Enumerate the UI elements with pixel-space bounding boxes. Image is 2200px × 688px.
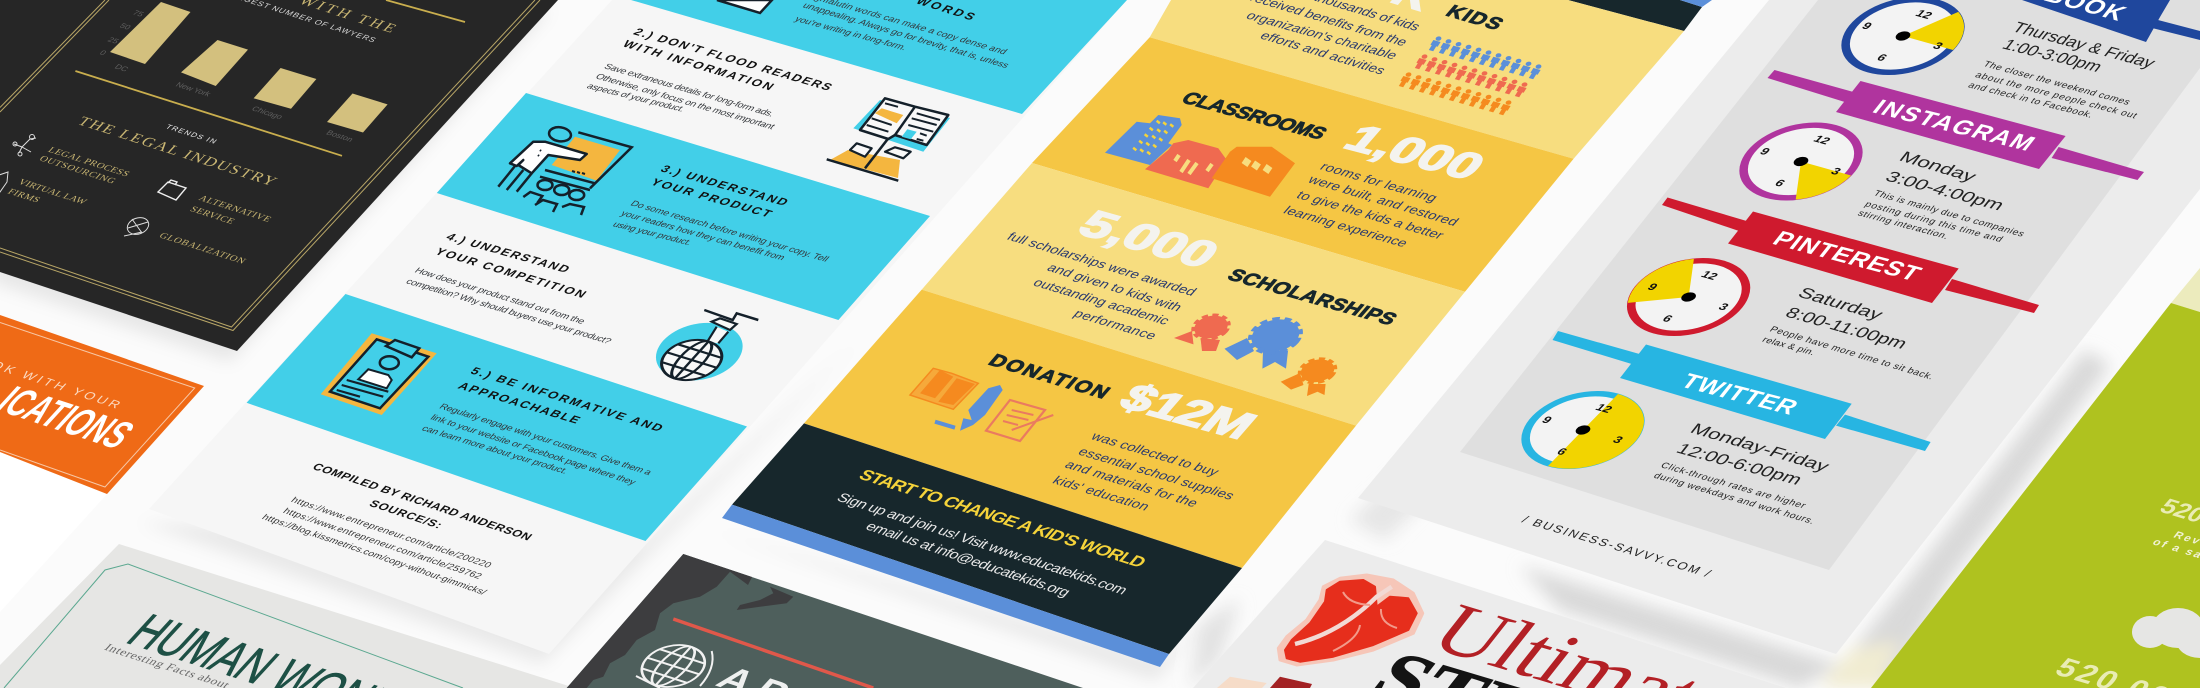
bar chart: lawyers by city: 75 — [131, 9, 146, 18]
text block: legal trends list: ALTERNATIVE — [196, 194, 273, 224]
band: scholarships — [922, 163, 1465, 426]
ribbon: instagram — [1768, 70, 2144, 180]
text: instagram times: 3:00-4:00pm — [1882, 168, 2009, 214]
call to action: email us at info@educatekids.org — [862, 520, 1073, 600]
text block: legal trends list — [5, 146, 273, 266]
text: tip 5: link to your website or Facebook page where they — [428, 413, 638, 487]
stat: 1,000 rooms: to give the kids a better — [1293, 189, 1448, 242]
text: credits and sources: https://www.entrepreneur.com/article/200220 — [288, 496, 494, 570]
text: tip 3: 3.) UNDERSTAND — [658, 163, 792, 208]
stat: kids: KIDS — [1441, 2, 1507, 34]
icon: disco ball — [639, 310, 759, 390]
text: tip 3: your readers how they can benefit from — [618, 209, 787, 263]
section: instagram — [1721, 70, 2144, 244]
ribbon: twitter — [1552, 331, 1931, 451]
stat: kids: organization's charitable — [1243, 9, 1401, 62]
text: instagram times: This is mainly due to companies — [1871, 189, 2027, 239]
panel: black legal industry card — [0, 0, 558, 351]
text: facebook times: The closer the weekend comes — [1981, 60, 2133, 107]
icon: id clipboard — [321, 333, 437, 415]
text: tip 1 body: unappealing. Always go for brevity, that is, unless — [800, 1, 1011, 70]
text: tip 3: Do some research before writing your copy. Tell — [628, 199, 831, 264]
icon: rows of people — [1397, 36, 1543, 116]
band: tip 1 — [631, 0, 1127, 114]
clock: instagram: 12 — [1810, 133, 1834, 147]
clock: facebook — [1823, 0, 1986, 84]
text: tip 3 — [610, 163, 831, 264]
text: tip 5 — [419, 365, 666, 487]
ribbon: twitter: TWITTER — [1675, 370, 1803, 420]
stat: donation: essential school supplies — [1075, 445, 1238, 502]
panel: social media timing card — [1358, 0, 2200, 654]
text: tip 1 body: you're writing in long-form. — [792, 15, 909, 52]
stat: 5,000 scholarships — [1004, 202, 1401, 342]
clock: twitter: 9 — [1539, 414, 1555, 426]
text: facebook times: and check in to Facebook. — [1966, 81, 2095, 120]
text: credits and sources: COMPILED BY RICHARD ANDERSON — [310, 461, 535, 543]
clock: twitter: 12 — [1592, 402, 1616, 415]
text: credits and sources: https://blog.kissmetrics.com/copy-without-gimmicks/ — [259, 513, 489, 597]
text: tip 2: Otherwise, only focus on the most important — [593, 72, 777, 132]
panel: human wonders card — [0, 544, 575, 688]
swatches — [1217, 677, 1267, 688]
stat: 5,000 scholarships: SCHOLARSHIPS — [1223, 266, 1401, 329]
panel: green card — [1871, 268, 2200, 688]
red rule — [673, 619, 873, 688]
text: twitter times: during weekdays and work hours. — [1651, 471, 1817, 526]
clock: pinterest: 3 — [1715, 301, 1732, 313]
text: facebook times — [1966, 18, 2160, 121]
band: call to action — [732, 423, 1242, 654]
stat: 5,000 scholarships: and given to kids with — [1044, 260, 1186, 314]
clock: instagram: 9 — [1757, 146, 1773, 157]
clock: instagram: 6 — [1772, 177, 1788, 189]
stat: donation: and materials for the — [1062, 457, 1202, 510]
clock: facebook: 6 — [1874, 52, 1890, 64]
text: pinterest times: relax & pin. — [1760, 335, 1817, 357]
panel: dark map card — [567, 554, 1083, 688]
stat: kids — [1243, 0, 1507, 77]
bar chart: lawyers by city: Chicago — [250, 105, 285, 121]
text: twitter times: Click-through rates are higher — [1658, 461, 1809, 511]
clock: twitter: 3 — [1610, 434, 1626, 446]
text: pinterest times: Saturday — [1794, 284, 1888, 323]
clock: instagram — [1721, 114, 1884, 209]
icon: award ribbons — [1174, 312, 1341, 396]
text block: legal trends list: FIRMS — [5, 187, 42, 205]
text: instagram times: posting during this time and — [1862, 200, 2005, 244]
clock: pinterest: 6 — [1659, 313, 1676, 325]
ribbon: facebook — [1969, 0, 2200, 42]
call to action: Sign up and join us! Visit www.educatekids.com — [833, 491, 1130, 598]
stat: donation: was collected to buy — [1087, 430, 1222, 478]
bar chart: lawyers by city: Boston — [324, 129, 356, 144]
ribbon: pinterest — [1662, 198, 2039, 313]
text: twitter times — [1651, 420, 1834, 526]
band: kids — [1150, 0, 1684, 159]
ribbon: instagram: INSTAGRAM — [1867, 96, 2040, 156]
heading: trends in the legal industry: TRENDS IN — [164, 123, 219, 145]
panel: blue tips card — [149, 0, 1127, 654]
stat: 5,000 scholarships: outstanding academic — [1030, 276, 1173, 327]
bar chart: lawyers by city: 50 — [118, 22, 133, 31]
text block: legal trends list: LEGAL PROCESS — [45, 146, 132, 179]
text: tip 2: Save extraneous details for long-form ads. — [601, 62, 777, 119]
map silhouette — [567, 554, 752, 688]
bar chart: lawyers by city — [98, 2, 388, 144]
ribbon: pinterest: PINTEREST — [1767, 227, 1926, 286]
icon: presenter at board — [498, 126, 632, 215]
text: pinterest times: 8:00-11:00pm — [1782, 304, 1912, 352]
text: tip 4: 4.) UNDERSTAND — [443, 231, 573, 275]
stat: donation: $12M — [1110, 376, 1266, 447]
icon: cloud — [2132, 608, 2200, 658]
text: tip 4: How does your product stand out from the — [412, 266, 587, 326]
text: tip 4: YOUR COMPETITION — [432, 246, 589, 300]
stat: donation: DONATION — [984, 351, 1115, 402]
text: tip 2: WITH INFORMATION — [620, 38, 777, 93]
stat: 1,000 rooms: were built, and restored — [1304, 173, 1462, 228]
icon: top badge — [717, 0, 772, 13]
text: tip 5: Regularly engage with your customers. Give them a — [437, 402, 654, 478]
stat: donation — [984, 351, 1266, 513]
heading: classrooms: CLASSROOMS — [1177, 89, 1331, 143]
stat: kids: efforts and activities — [1257, 29, 1389, 77]
text block: legal trends list: VIRTUAL LAW — [16, 178, 90, 207]
band: classrooms — [1032, 37, 1574, 292]
panel: orange publications card — [0, 315, 204, 612]
footer: website: / BUSINESS-SAVVY.COM / — [1519, 514, 1714, 580]
stat: 5,000 scholarships: full scholarships were awarded — [1004, 229, 1200, 298]
band: tip 3 — [437, 93, 930, 320]
section: pinterest — [1606, 198, 2039, 382]
text: tip 3: YOUR PRODUCT — [648, 176, 775, 220]
clock: facebook: 9 — [1859, 20, 1875, 32]
text: instagram times — [1855, 148, 2027, 244]
icon: briefcase — [158, 180, 186, 200]
stat: 1,000 rooms: learning experience — [1280, 204, 1411, 250]
text: tip 5: 5.) BE INFORMATIVE AND — [468, 365, 666, 434]
bar chart: lawyers by city: 0 — [98, 49, 108, 57]
text: instagram times: Monday — [1896, 148, 1981, 185]
band: tip 5 — [247, 294, 747, 541]
clock: instagram: 3 — [1828, 165, 1844, 177]
stat: 1,000 rooms: 1,000 — [1335, 117, 1495, 188]
icon: steak — [1278, 575, 1423, 665]
text block: legal trends list: GLOBALIZATION — [157, 231, 248, 266]
text: pinterest times: People have more time to sit back. — [1767, 325, 1936, 382]
text: credits and sources: https://www.entrepreneur.com/article/259762 — [280, 507, 484, 581]
text block: legal trends list: SERVICE — [187, 205, 237, 226]
text: tip 3: using your product. — [610, 220, 694, 247]
text: tip 2: aspects of your product. — [584, 82, 687, 114]
panel: steak card — [1193, 540, 1786, 688]
text: tip 4 — [403, 231, 614, 346]
stat: 5,000 scholarships: performance — [1071, 307, 1160, 342]
stat: 5,000 scholarships: 5,000 — [1069, 202, 1229, 276]
icon: network — [13, 134, 36, 156]
clock: pinterest: 9 — [1644, 281, 1661, 293]
band: donation — [804, 290, 1356, 568]
text: twitter times: Monday-Friday — [1687, 420, 1834, 475]
icon: book, pen and notepad — [910, 368, 1053, 441]
icon: school buildings — [1105, 115, 1295, 197]
text: credits and sources — [259, 461, 535, 597]
heading: trends in the legal industry: THE LEGAL INDUSTRY — [74, 114, 281, 189]
text: tip 2 — [584, 26, 835, 132]
panel: yellow education card — [722, 0, 1712, 667]
text: twitter times: 12:00-6:00pm — [1673, 440, 1807, 488]
text: tip 5: APPROACHABLE — [455, 380, 583, 426]
stat: 1,000 rooms — [1280, 117, 1495, 250]
bar chart: lawyers by city: 25 — [106, 36, 121, 45]
band: dark top — [1568, 0, 1702, 31]
text: pinterest times — [1760, 284, 1936, 382]
icon: globe — [124, 215, 151, 237]
bar chart: lawyers by city: New York — [174, 81, 213, 98]
section: twitter — [1501, 331, 1931, 526]
clock: twitter — [1501, 381, 1668, 480]
text: top stat — [2150, 495, 2200, 565]
text: facebook times: 1:00-3:00pm — [1999, 36, 2107, 75]
icon: globe — [630, 638, 717, 688]
stat: donation: kids' education — [1050, 474, 1153, 513]
bar chart: lawyers by city: DC — [113, 63, 130, 73]
text: tip 4: competition? Why should buyers use your product? — [403, 277, 614, 346]
band: blue footer — [722, 505, 1169, 667]
section: facebook — [1823, 0, 2200, 121]
icon: virtual law — [0, 172, 8, 192]
clock: facebook: 3 — [1930, 40, 1946, 52]
icon: open book on stand — [827, 98, 950, 181]
text: instagram times: stirring interaction. — [1855, 209, 1951, 241]
text block: legal trends list: OUTSOURCING — [37, 154, 118, 186]
stat: 1,000 rooms: rooms for learning — [1317, 160, 1441, 204]
clock: twitter: 6 — [1554, 446, 1570, 458]
clock: pinterest: 12 — [1698, 269, 1721, 282]
text: tip 2: 2.) DON'T FLOOD READERS — [631, 26, 835, 93]
clock: pinterest — [1606, 249, 1768, 344]
text: tip 5: can learn more about your product. — [419, 424, 570, 476]
clock: facebook: 12 — [1912, 8, 1936, 21]
call to action: START TO CHANGE A KID'S WORLD — [855, 466, 1150, 571]
text: credits and sources: SOURCE/S: — [366, 498, 445, 531]
text: facebook times: Thursday & Friday — [2009, 18, 2160, 71]
text: facebook times: about the more people check out — [1973, 71, 2140, 121]
